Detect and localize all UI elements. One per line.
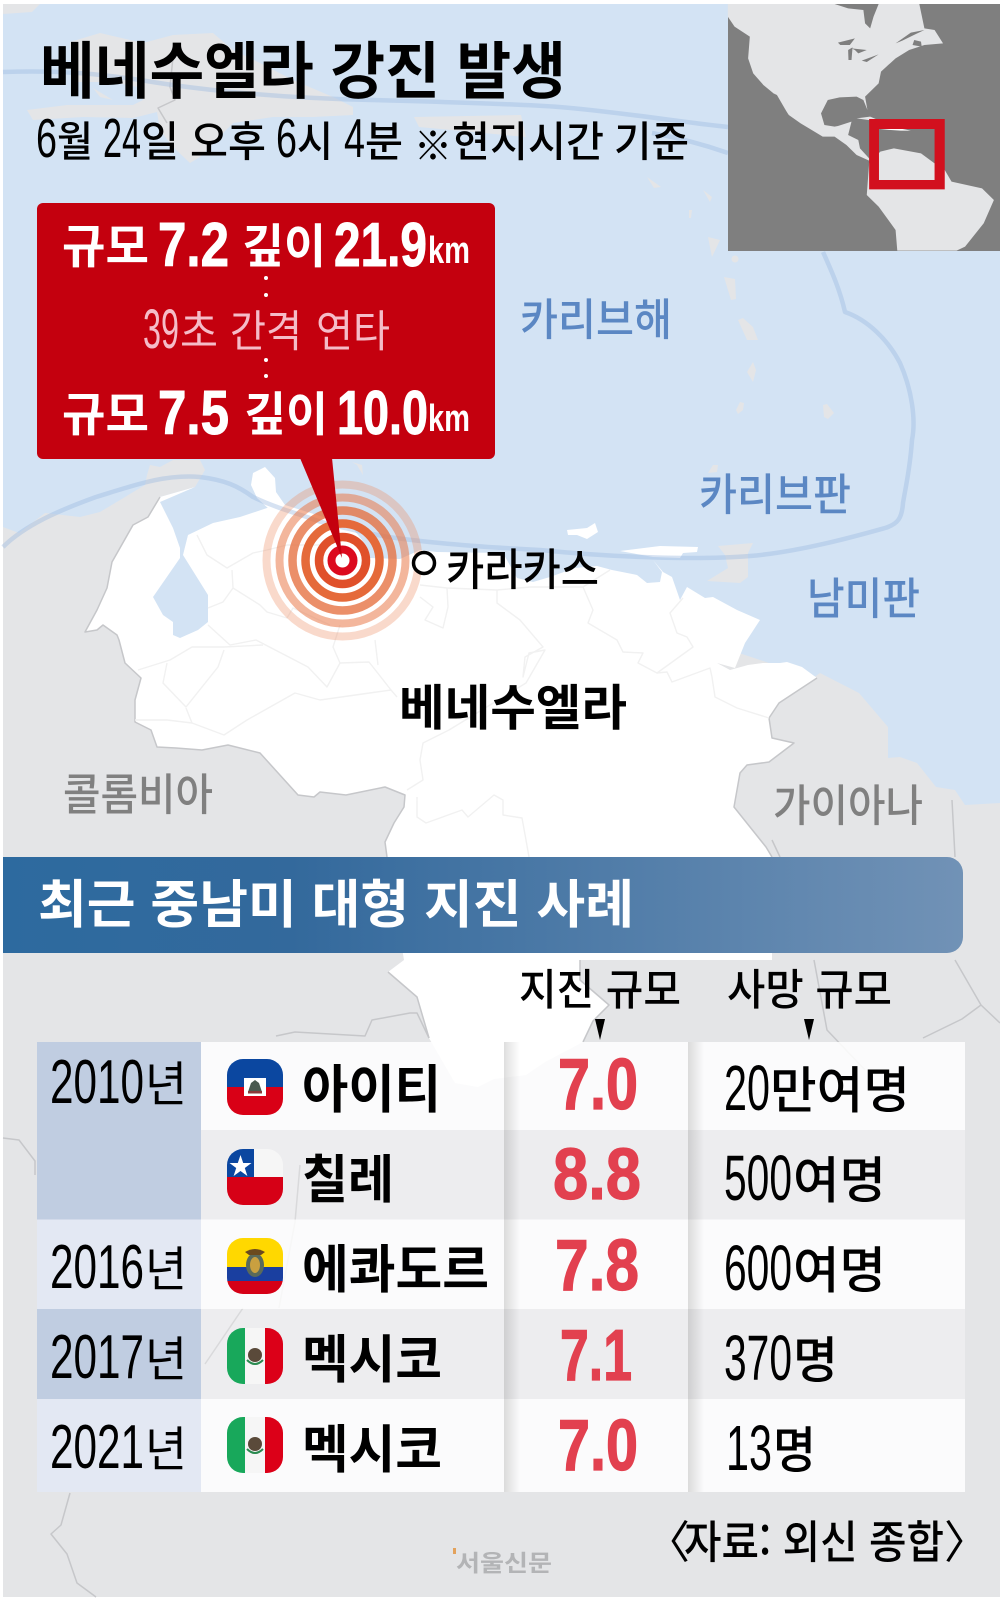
banner: recent quakes heading: 최근 중남미 대형 지진 사례 bbox=[38, 863, 634, 938]
row: 2010 Haiti: 7.0 bbox=[558, 1045, 638, 1125]
callout: interval: 간격 bbox=[230, 296, 302, 360]
source note: 〉 bbox=[944, 1506, 989, 1571]
row: 2010 Haiti bbox=[52, 1058, 904, 1115]
row: 2017 Mexico: 년 bbox=[145, 1320, 187, 1390]
inset: red locator box bbox=[869, 119, 945, 189]
row: 2010 Chile: 500 bbox=[724, 1142, 792, 1214]
Haiti border bbox=[158, 57, 175, 123]
table row backgrounds bbox=[201, 1042, 965, 1492]
source note: 〈 bbox=[645, 1506, 690, 1571]
borders south of the banner bbox=[3, 800, 1000, 1597]
callout: dotted connectors bbox=[264, 276, 268, 378]
source note: 자료: 외신 종합 bbox=[684, 1506, 944, 1571]
row: 2016 Ecuador: 7.8 bbox=[555, 1226, 639, 1306]
subtitle: date and time: 월 bbox=[57, 108, 93, 170]
callout pointer bbox=[300, 458, 342, 558]
subtitle: date and time: 6 bbox=[276, 107, 297, 169]
row: 2010 Haiti: 아이티 bbox=[302, 1048, 441, 1123]
inset locator map bbox=[728, 4, 1000, 251]
callout: first quake bbox=[62, 208, 470, 280]
tectonic plate boundary lines bbox=[3, 71, 914, 558]
row: 2010 Haiti: 년 bbox=[145, 1045, 187, 1115]
table column shading bbox=[504, 1042, 704, 1492]
flag: Mexico bbox=[227, 1417, 283, 1473]
row: 2016 Ecuador: 년 bbox=[145, 1230, 187, 1300]
land: caribbean islands bbox=[3, 4, 834, 583]
subtitle: date and time: 6 bbox=[36, 107, 57, 169]
callout: interval: 39 bbox=[143, 297, 179, 360]
epicentre rings bbox=[266, 484, 418, 636]
labels: seas and plates bbox=[520, 284, 920, 627]
row: 2016 Ecuador: 600 bbox=[724, 1232, 792, 1304]
callout: first quake: 7.2 bbox=[158, 211, 229, 280]
table of earthquakes bbox=[37, 1042, 965, 1492]
label: Caracas: 카라카스 bbox=[446, 534, 599, 598]
callout: second quake: 깊이 bbox=[244, 376, 328, 445]
flag: Ecuador bbox=[227, 1238, 283, 1294]
callout: second quake: 규모 bbox=[62, 376, 149, 445]
row: 2016 Ecuador: 여명 bbox=[793, 1231, 886, 1303]
label: Guyana: 가이아나 bbox=[773, 770, 923, 834]
callout: first quake: 21.9 bbox=[334, 211, 427, 280]
flag: Chile bbox=[227, 1149, 283, 1205]
subtitle: date and time: 기준 bbox=[614, 108, 689, 170]
row: 2017 Mexico: 2017 bbox=[50, 1323, 144, 1392]
subtitle: date and time: 일 bbox=[141, 108, 179, 170]
row: 2021 Mexico: 명 bbox=[773, 1411, 816, 1483]
subtitle: date and time bbox=[36, 107, 689, 172]
subtitle: date and time: 오후 bbox=[190, 108, 266, 170]
internal state borders bbox=[135, 535, 769, 857]
land: neighbouring countries bbox=[3, 460, 1000, 1597]
callout: first quake: 깊이 bbox=[242, 208, 326, 277]
table year column bbox=[37, 1042, 201, 1492]
land: Venezuela bbox=[85, 467, 817, 1087]
row: 2010 Chile bbox=[227, 1147, 880, 1205]
inset: South America bbox=[867, 148, 994, 251]
subtitle: date and time: 4 bbox=[344, 107, 365, 169]
watermark: Seoul Shinmun: 서울신문 bbox=[456, 1544, 552, 1578]
callout: first quake: 규모 bbox=[62, 208, 149, 277]
row: 2021 Mexico bbox=[52, 1417, 811, 1473]
callout: second quake: 10.0 bbox=[337, 379, 428, 448]
row: 2021 Mexico: 13 bbox=[726, 1412, 772, 1484]
flag: Haiti bbox=[227, 1059, 283, 1115]
callout: interval bbox=[143, 296, 390, 360]
row: 2017 Mexico: 명 bbox=[793, 1321, 838, 1393]
row: 2021 Mexico: 년 bbox=[145, 1410, 187, 1480]
callout: interval: 연타 bbox=[316, 296, 390, 360]
row: 2021 Mexico: 2021 bbox=[50, 1413, 144, 1482]
row: 2010 Chile: 여명 bbox=[793, 1141, 886, 1213]
row: 2017 Mexico: 멕시코 bbox=[302, 1318, 442, 1393]
row: 2021 Mexico: 7.0 bbox=[558, 1406, 638, 1486]
row: 2016 Ecuador bbox=[52, 1238, 880, 1294]
label: Venezuela: 베네수엘라 bbox=[399, 669, 627, 740]
row: 2010 Chile: 8.8 bbox=[553, 1135, 641, 1215]
row: 2010 Haiti: 2010 bbox=[50, 1048, 144, 1117]
subtitle: date and time: 24 bbox=[103, 107, 141, 169]
subtitle: date and time: ※ bbox=[414, 114, 452, 172]
banner: recent quakes heading bbox=[3, 857, 963, 953]
subtitle: date and time: 현지시간 bbox=[452, 108, 604, 170]
labels: seas and plates: 카리브해 bbox=[520, 284, 672, 348]
labels: seas and plates: 남미판 bbox=[807, 563, 920, 627]
row: 2010 Chile: 칠레 bbox=[302, 1138, 394, 1213]
labels: seas and plates: 카리브판 bbox=[699, 459, 851, 523]
subtitle: date and time: 분 bbox=[365, 108, 403, 170]
inset: North America bbox=[728, 4, 943, 161]
subtitle: date and time: 시 bbox=[297, 108, 333, 170]
callout: second quake bbox=[62, 376, 470, 448]
column header: magnitude: 지진 규모 bbox=[519, 956, 681, 1018]
red callout: quake figures bbox=[37, 203, 495, 558]
row: 2016 Ecuador: 에콰도르 bbox=[302, 1228, 489, 1303]
title: 베네수엘라 강진 발생 bbox=[40, 21, 566, 111]
row: 2010 Haiti: 20 bbox=[724, 1052, 770, 1124]
callout: first quake: km bbox=[428, 230, 470, 272]
callout: second quake: 7.5 bbox=[158, 379, 229, 448]
row: 2021 Mexico: 멕시코 bbox=[302, 1408, 442, 1483]
callout: second quake: km bbox=[428, 398, 470, 440]
callout: interval: 초 bbox=[180, 296, 218, 360]
row: 2016 Ecuador: 2016 bbox=[50, 1233, 144, 1302]
row: 2017 Mexico bbox=[52, 1328, 832, 1384]
column header: deaths: 사망 규모 bbox=[727, 956, 892, 1018]
row: 2010 Haiti: 만여명 bbox=[770, 1051, 910, 1123]
row: 2017 Mexico: 7.1 bbox=[560, 1316, 632, 1396]
row: 2017 Mexico: 370 bbox=[724, 1322, 792, 1394]
label: Colombia: 콜롬비아 bbox=[63, 759, 213, 823]
flag: Mexico bbox=[227, 1328, 283, 1384]
